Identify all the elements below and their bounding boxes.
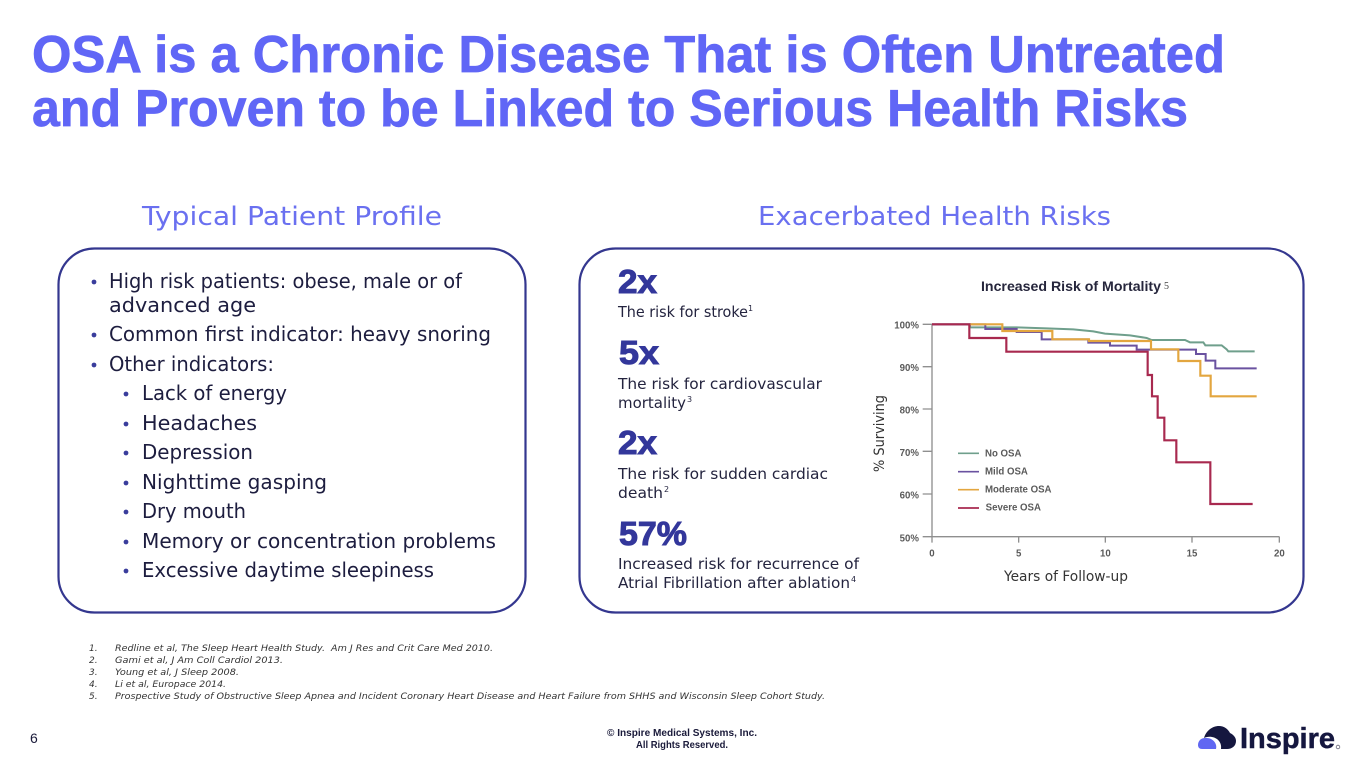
x axis title: Years of Follow-up — [1003, 569, 1128, 585]
footnotes: Young et al, J Sleep 2008. — [115, 668, 239, 678]
stat: atrial fibrillation: 4 — [851, 575, 856, 584]
moderate OSA line — [970, 324, 1257, 396]
bullet list: Excessive daytime sleepiness — [142, 558, 434, 582]
icon: cloud — [1198, 726, 1236, 749]
bullet list: Nighttime gasping — [142, 470, 327, 494]
x axis tick labels: 20 — [1274, 549, 1285, 560]
x axis tick labels: 0 — [929, 549, 935, 560]
stat: atrial fibrillation — [618, 515, 860, 592]
stat: sudden cardiac death — [617, 424, 828, 502]
x axis tick labels: 10 — [1100, 549, 1111, 560]
copyright — [607, 727, 757, 751]
footnotes: 4. — [89, 680, 98, 690]
legend: Mild OSA — [985, 466, 1028, 477]
bullet list: Lack of energy — [142, 381, 287, 405]
stat: cardiovascular mortality — [617, 334, 823, 412]
heading: typical patient profile: Typical Patient Profile — [141, 202, 442, 232]
y axis tick labels: 90% — [900, 363, 919, 374]
footnotes: 2. — [89, 656, 98, 666]
legend — [958, 448, 1052, 513]
title: OSA is a Chronic Disease That is Often Untreated — [32, 26, 1225, 84]
legend: Severe OSA — [986, 502, 1041, 513]
footnotes: Gami et al, J Am Coll Cardiol 2013. — [115, 656, 283, 666]
heading: exacerbated health risks: Exacerbated Health Risks — [758, 202, 1111, 232]
stat: atrial fibrillation: Increased risk for recurrence of — [618, 555, 860, 573]
bullet list: Dry mouth — [142, 499, 246, 523]
footnotes: Redline et al, The Sleep Heart Health Study. Am J Res and Crit Care Med 2010. — [115, 644, 493, 654]
axes — [923, 324, 1279, 543]
logo: Inspire: Inspire — [1240, 723, 1335, 755]
panel: typical patient profile — [58, 248, 526, 612]
stat: cardiovascular mortality: 5x — [619, 334, 660, 371]
no OSA line — [932, 324, 1255, 351]
footnotes: 3. — [89, 668, 98, 678]
line chart: survival — [894, 320, 1285, 560]
stat: stroke: The risk for stroke — [617, 303, 748, 321]
bullet list: advanced age — [109, 293, 256, 317]
bullet list: High risk patients: obese, male or of — [109, 269, 463, 293]
stat: stroke: 1 — [748, 304, 753, 313]
stat: cardiovascular mortality: 3 — [687, 395, 692, 404]
x axis tick labels: 5 — [1016, 549, 1022, 560]
legend: Moderate OSA — [985, 485, 1052, 496]
stat: sudden cardiac death: 2x — [618, 424, 658, 461]
bullet list: Depression — [142, 440, 253, 464]
mild OSA line — [932, 324, 1257, 368]
severe OSA line — [932, 324, 1253, 504]
title: and Proven to be Linked to Serious Health Risks — [32, 80, 1188, 138]
stat: atrial fibrillation: 57% — [619, 515, 687, 552]
y axis tick labels: 50% — [900, 533, 919, 544]
chart title: Increased Risk of Mortality — [981, 278, 1161, 294]
y axis tick labels: 60% — [900, 491, 919, 502]
y axis title: % Surviving — [872, 395, 888, 472]
y axis tick labels: 80% — [900, 405, 919, 416]
title — [32, 26, 1225, 138]
footnotes: Prospective Study of Obstructive Sleep Apnea and Incident Coronary Heart Disease and Heart Failure from SHHS and Wisconsin Sleep Cohort Study. — [115, 692, 825, 702]
bullet list: Common first indicator: heavy snoring — [109, 322, 491, 346]
stat: sudden cardiac death: death — [618, 484, 663, 502]
stat: sudden cardiac death: The risk for sudden cardiac — [617, 465, 828, 483]
bullet list: Memory or concentration problems — [142, 529, 496, 553]
copyright: All Rights Reserved. — [636, 739, 728, 751]
x axis tick labels: 15 — [1187, 549, 1198, 560]
y axis tick labels: 100% — [894, 320, 919, 331]
footnotes: 1. — [89, 644, 98, 654]
bullet list: Headaches — [142, 411, 257, 435]
bullet list — [92, 269, 496, 582]
y axis tick labels: 70% — [900, 448, 919, 459]
y axis tick labels — [894, 320, 919, 544]
stat: sudden cardiac death: 2 — [664, 485, 669, 494]
x axis tick labels — [929, 549, 1285, 560]
stat: cardiovascular mortality: The risk for cardiovascular — [617, 375, 823, 393]
footnotes: 5. — [89, 692, 98, 702]
copyright: © Inspire Medical Systems, Inc. — [607, 727, 757, 739]
chart title: 5 — [1164, 281, 1169, 292]
legend: No OSA — [985, 448, 1022, 459]
stat: stroke: 2x — [618, 263, 658, 300]
stat: cardiovascular mortality: mortality — [618, 394, 686, 412]
stat: stroke — [617, 263, 753, 321]
logo: Inspire — [1198, 723, 1340, 755]
bullet list: Other indicators: — [109, 352, 274, 376]
footnotes: Li et al, Europace 2014. — [115, 680, 226, 690]
footnotes — [89, 644, 825, 702]
page number: 6 — [30, 730, 38, 746]
stat: atrial fibrillation: Atrial Fibrillation after ablation — [618, 574, 850, 592]
panel: exacerbated health risks — [580, 248, 1304, 612]
